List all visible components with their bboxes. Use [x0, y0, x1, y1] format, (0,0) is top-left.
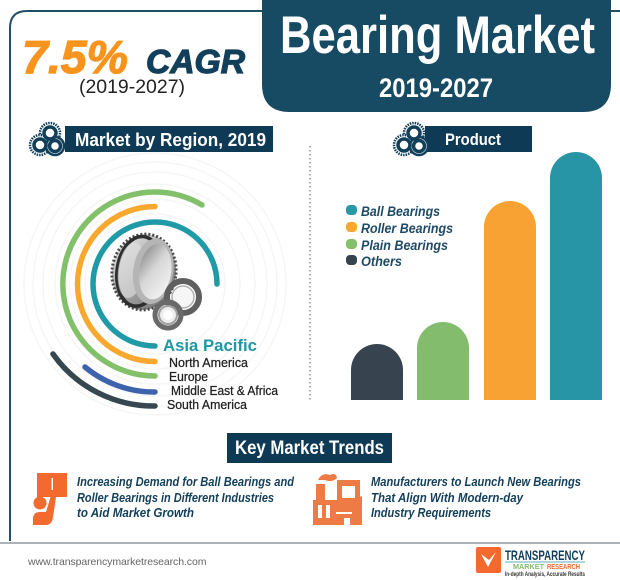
legend: product: Plain Bearings — [361, 238, 448, 253]
icon: person holding sign — [33, 473, 67, 525]
arc: North America — [78, 206, 155, 362]
icon: factory — [313, 474, 362, 525]
logo: transparency market research: RESEARCH — [547, 564, 580, 571]
bar: ball bearings — [550, 152, 602, 400]
radial chart: market by region — [24, 153, 286, 415]
trend text: right — [371, 474, 581, 520]
trend text: left: Increasing Demand for Ball Bearings and — [77, 474, 295, 489]
trend text: right: Manufacturers to Launch New Bearings — [371, 474, 581, 489]
arc: Europe — [63, 192, 202, 376]
title years: 2019-2027 — [379, 73, 493, 103]
logo: transparency market research: In-depth Analysis, Accurate Results — [505, 572, 586, 578]
icon: gears region — [30, 123, 64, 155]
footer rule — [0, 542, 620, 544]
logo: transparency market research — [476, 547, 586, 578]
arc: Middle East and Africa — [85, 367, 155, 392]
heading: key market trends: Key Market Trends — [235, 438, 384, 459]
legend: product — [346, 204, 453, 269]
CAGR callout: 7.5% — [22, 31, 128, 83]
trend text: left: to Aid Market Growth — [77, 505, 194, 520]
trend text: right: Industry Requirements — [371, 505, 491, 520]
CAGR callout — [22, 31, 245, 98]
region labels — [163, 336, 278, 412]
title panel — [262, 0, 611, 112]
region labels: Europe — [169, 370, 208, 384]
legend: product: Others — [361, 254, 402, 269]
divider — [309, 146, 311, 400]
trend text: left: Roller Bearings in Different Industries — [77, 490, 274, 505]
arc: South America — [53, 354, 155, 406]
website url: www.transparencymarketresearch.com — [27, 556, 207, 568]
region labels: North America — [169, 356, 248, 370]
heading: product: Product — [445, 130, 501, 149]
CAGR callout: CAGR — [146, 43, 245, 80]
bar: others — [351, 344, 403, 400]
bar: plain bearings — [417, 322, 469, 400]
CAGR callout: (2019-2027) — [79, 77, 185, 98]
trend text: left — [77, 474, 295, 520]
bar chart: product — [351, 152, 602, 400]
heading: key market trends — [227, 433, 392, 463]
region labels: Middle East & Africa — [171, 384, 278, 398]
logo: transparency market research: MARKET — [513, 564, 545, 571]
logo: transparency market research: TRANSPARENCY — [505, 547, 585, 563]
trend text: right: That Align With Modern-day — [371, 490, 524, 505]
region labels: South America — [167, 398, 247, 412]
heading: market by region: Market by Region, 2019 — [75, 130, 266, 150]
legend: product: Roller Bearings — [361, 221, 453, 236]
arc: Asia Pacific — [93, 222, 217, 346]
icon: gears product — [394, 123, 428, 155]
region labels: Asia Pacific — [163, 336, 257, 355]
legend: product: Ball Bearings — [361, 204, 440, 219]
bearing illustration — [107, 230, 199, 328]
heading: product — [425, 126, 532, 152]
bar: roller bearings — [484, 201, 536, 400]
